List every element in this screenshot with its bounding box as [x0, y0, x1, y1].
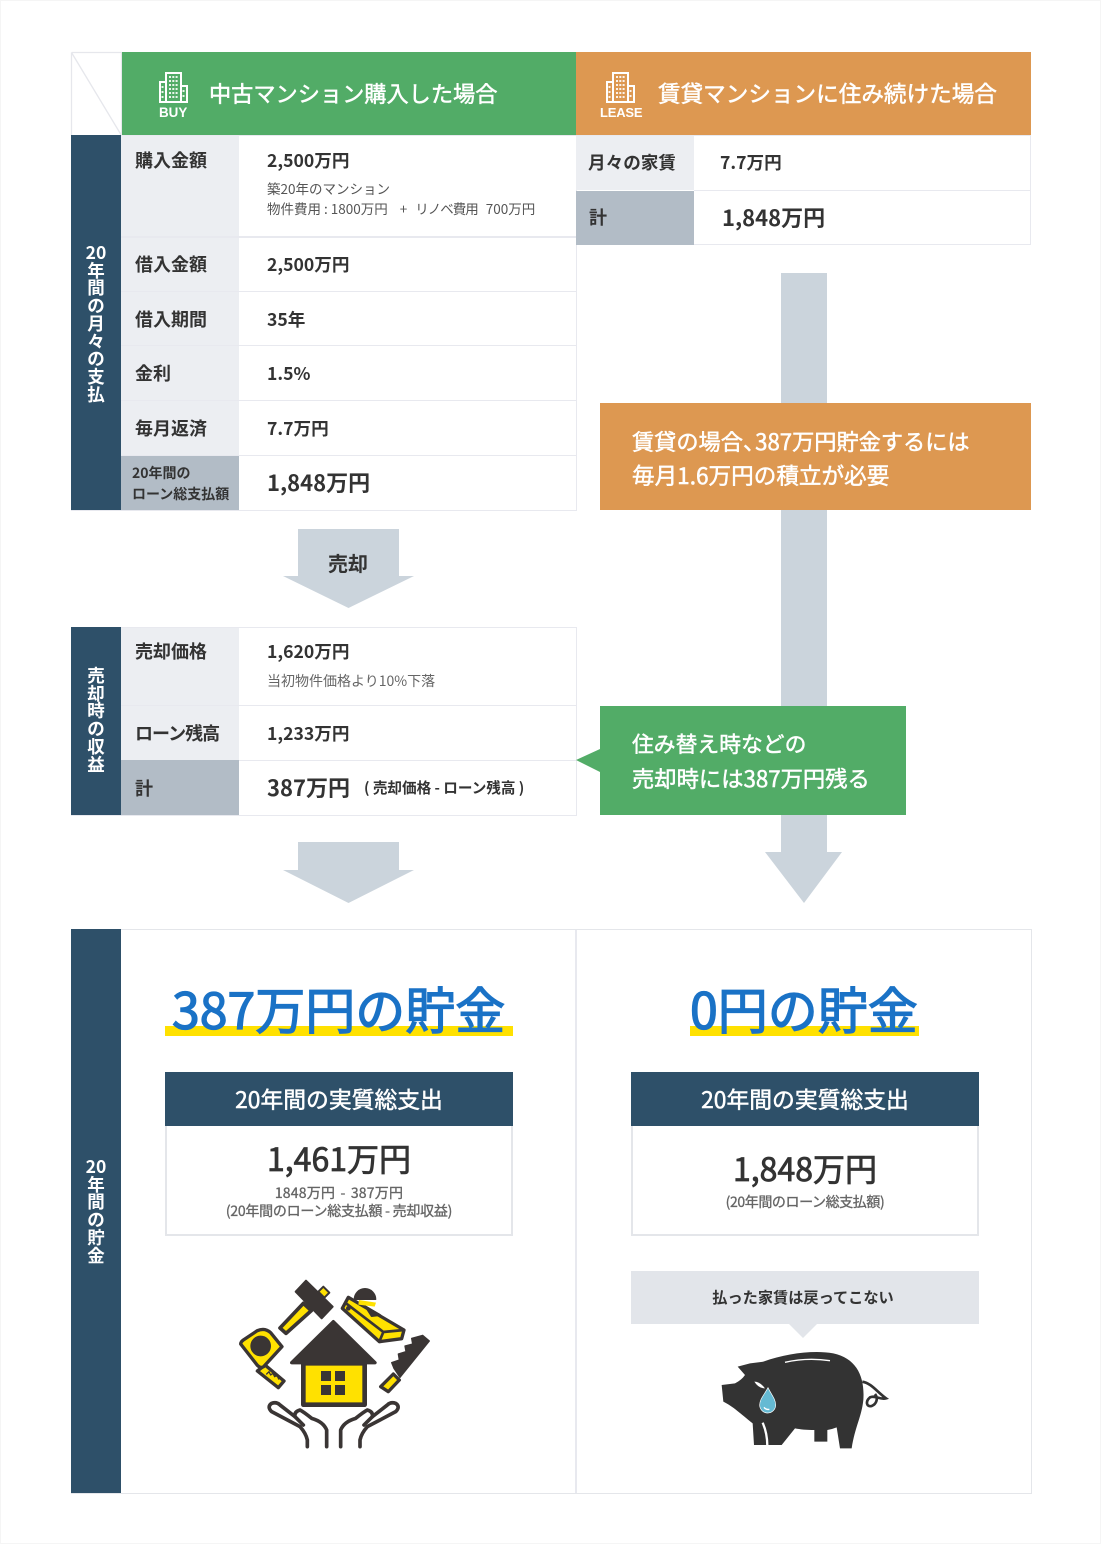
label cell: total repayment [121, 456, 239, 510]
row: rent value: 7.7万円 [720, 150, 782, 175]
side label text: monthly payment: 年 [87, 258, 105, 283]
callout shape [576, 706, 906, 815]
row: sale price label: 売却価格 [135, 638, 207, 664]
label: BUY: BUY [159, 105, 187, 120]
speech bubble: rent not returned [631, 1271, 979, 1338]
side label text: sale income: の [87, 716, 105, 741]
callout: sale remainder [576, 706, 906, 815]
row: sale total formula: ( 売却価格 - ローン残高 ) [364, 777, 524, 798]
side label text: monthly payment: 々 [87, 329, 105, 354]
panel: sale income table [71, 627, 577, 816]
row: sale price note: 当初物件価格より10%下落 [267, 671, 435, 691]
label cell: rent total [576, 191, 694, 245]
row: monthly repayment value: 7.7万円 [267, 416, 329, 441]
row: loan amount label: 借入金額 [135, 251, 207, 277]
note: lease total spend: (20年間のローン総支払額) [726, 1192, 884, 1212]
side label text: monthly payment: 支 [87, 364, 105, 389]
side label text: sale income: 時 [87, 698, 105, 723]
callout: rent savings [600, 403, 1031, 510]
side label text: monthly payment [86, 240, 106, 407]
header: buy [122, 52, 576, 136]
highlight: lease savings underline [690, 1026, 919, 1036]
value: buy total spend: 1,461万円 [267, 1135, 411, 1181]
side label text: monthly payment: 月 [87, 311, 105, 336]
heading: buy: 中古マンション購入した場合 [209, 77, 497, 109]
table corner cell [71, 52, 122, 135]
panel: savings result [71, 929, 1032, 1494]
row: total repayment label [132, 463, 229, 504]
side label text: sale income: 益 [87, 752, 105, 777]
label: LEASE: LEASE [600, 105, 642, 120]
row: rent total value: 1,848万円 [722, 201, 825, 233]
arrow label: sale: 売却 [328, 548, 368, 577]
row: interest label: 金利 [135, 360, 171, 386]
callout text line 2: 売却時には387万円残る [632, 762, 870, 794]
label cell: rent [576, 136, 694, 190]
icon: building buy [159, 72, 188, 103]
side label text: savings: 金 [87, 1243, 105, 1268]
side label text: sale income [87, 663, 105, 777]
panel: rent table [576, 135, 1031, 245]
card: buy total spend [165, 1072, 513, 1236]
side label text: savings: の [87, 1207, 105, 1232]
label column: monthly payment [121, 136, 239, 456]
card: lease total spend [631, 1072, 979, 1236]
row: total repayment label: 20年間の [132, 463, 191, 483]
row: purchase note 2: 物件費用 : 1800万円 + リノベ費用 700万円 [267, 198, 535, 218]
side label text: monthly payment: の [87, 293, 105, 318]
side label text: savings: 20 [86, 1154, 106, 1179]
bubble text: 払った家賃は戻ってこない [712, 1286, 894, 1308]
side label text: monthly payment: 間 [87, 275, 105, 300]
card header text: buy: 20年間の実質総支出 [235, 1082, 443, 1115]
callout text line 1: 賃貸の場合、387万円貯金するには [632, 425, 970, 457]
row: loan amount value: 2,500万円 [267, 252, 349, 277]
side label text: monthly payment: 払 [87, 382, 105, 407]
side label text: savings: 貯 [87, 1225, 105, 1250]
row: sale total label: 計 [135, 775, 153, 801]
callout text line 2: 毎月1.6万円の積立が必要 [632, 458, 889, 491]
row: purchase price value: 2,500万円 [267, 148, 349, 173]
arrow: sale [283, 529, 414, 608]
value: lease total spend: 1,848万円 [733, 1145, 877, 1191]
row: monthly repayment label: 毎月返済 [135, 415, 207, 441]
icon: building lease [606, 72, 635, 103]
row: purchase price label: 購入金額 [135, 147, 207, 173]
label column: sale income [121, 628, 239, 760]
side label text: monthly payment: 20 [86, 240, 106, 265]
row: rent label: 月々の家賃 [588, 150, 676, 175]
side label text: savings: 間 [87, 1189, 105, 1214]
side label text: savings: 年 [87, 1172, 105, 1197]
bubble shape [631, 1271, 979, 1338]
side label text: sale income: 収 [87, 734, 105, 759]
heading: lease: 賃貸マンションに住み続けた場合 [658, 76, 997, 109]
row: loan balance label: ローン残高 [135, 720, 219, 746]
side label text: monthly payment: の [87, 346, 105, 371]
card header text: lease: 20年間の実質総支出 [701, 1082, 909, 1115]
row: sale total value: 387万円 [267, 771, 350, 803]
card header: lease total spend [631, 1072, 979, 1126]
arrow: to savings [283, 842, 414, 903]
label cell: sale total [121, 760, 239, 815]
heading: lease savings: 0円の貯金 [690, 972, 918, 1044]
icon: crying pig [722, 1352, 889, 1448]
arrow: rent long arrow [765, 273, 842, 903]
side label text: savings [86, 1154, 106, 1268]
side label: savings [71, 929, 121, 1493]
formula: buy explanation: (20年間のローン総支払額 - 売却収益) [226, 1201, 452, 1221]
row: loan period label: 借入期間 [135, 306, 207, 332]
row: purchase note 1: 築20年のマンション [267, 178, 390, 198]
formula: buy numbers: 1848万円 - 387万円 [275, 1183, 403, 1203]
row: total repayment label: ローン総支払額 [132, 484, 229, 504]
icon: house with tools and hands [239, 1280, 430, 1448]
side label text: sale income: 売 [87, 663, 105, 688]
row: total repayment value: 1,848万円 [267, 466, 370, 498]
callout text line 1: 住み替え時などの [632, 728, 806, 759]
card header: buy total spend [165, 1072, 513, 1126]
side label: monthly payment [71, 135, 121, 510]
row: loan period value: 35年 [267, 307, 305, 332]
row: interest value: 1.5% [267, 361, 310, 386]
row: sale price value: 1,620万円 [267, 639, 349, 664]
panel: monthly payment table [71, 135, 577, 511]
heading: buy savings: 387万円の貯金 [172, 972, 505, 1044]
side label: sale income [71, 627, 121, 815]
header: lease [576, 52, 1031, 136]
highlight: buy savings underline [165, 1026, 513, 1036]
row: rent total label: 計 [589, 204, 607, 230]
row: loan balance value: 1,233万円 [267, 721, 349, 746]
side label text: sale income: 却 [87, 681, 105, 706]
